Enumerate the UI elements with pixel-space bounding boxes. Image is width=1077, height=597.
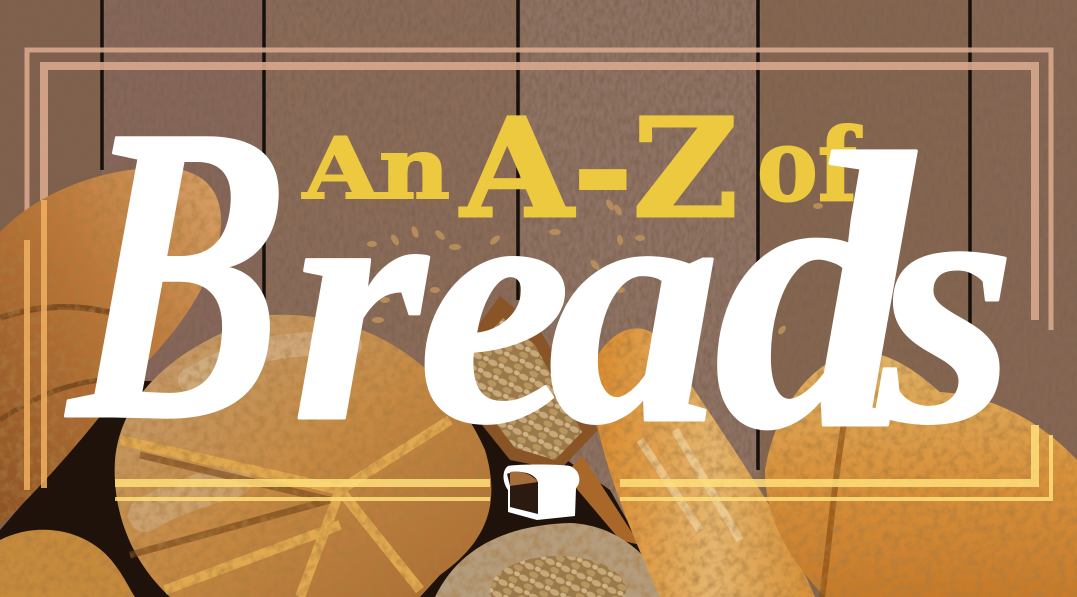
title: Breads: e [418,113,571,495]
icon: bread loaf [504,464,579,520]
bread: top left loaf [0,168,221,525]
title: Breads: r [292,111,432,493]
title: Breads: d [714,74,918,511]
bread: small bottom left bun [0,530,135,597]
decorative frame [27,50,1051,330]
frame overlay on breads [27,200,1051,499]
bread: right loaf [765,350,1077,597]
bread: baguette [590,328,815,597]
title: Breads: B [58,38,298,508]
wooden scoop with grain [460,296,640,545]
title: Breads: a [548,113,720,495]
burlap sack of grain [435,523,670,597]
bread: round scored loaf [115,315,491,597]
dark table shadow under breads [0,380,670,597]
subtitle: An A-Z of: of [757,106,862,224]
title: Breads [58,38,1016,511]
title: Breads: s [872,104,1016,497]
scattered wheat grains [367,198,823,336]
subtitle: An A-Z of: A-Z [459,89,738,249]
subtitle: An A-Z of [302,89,862,249]
subtitle: An A-Z of: An [302,119,450,218]
